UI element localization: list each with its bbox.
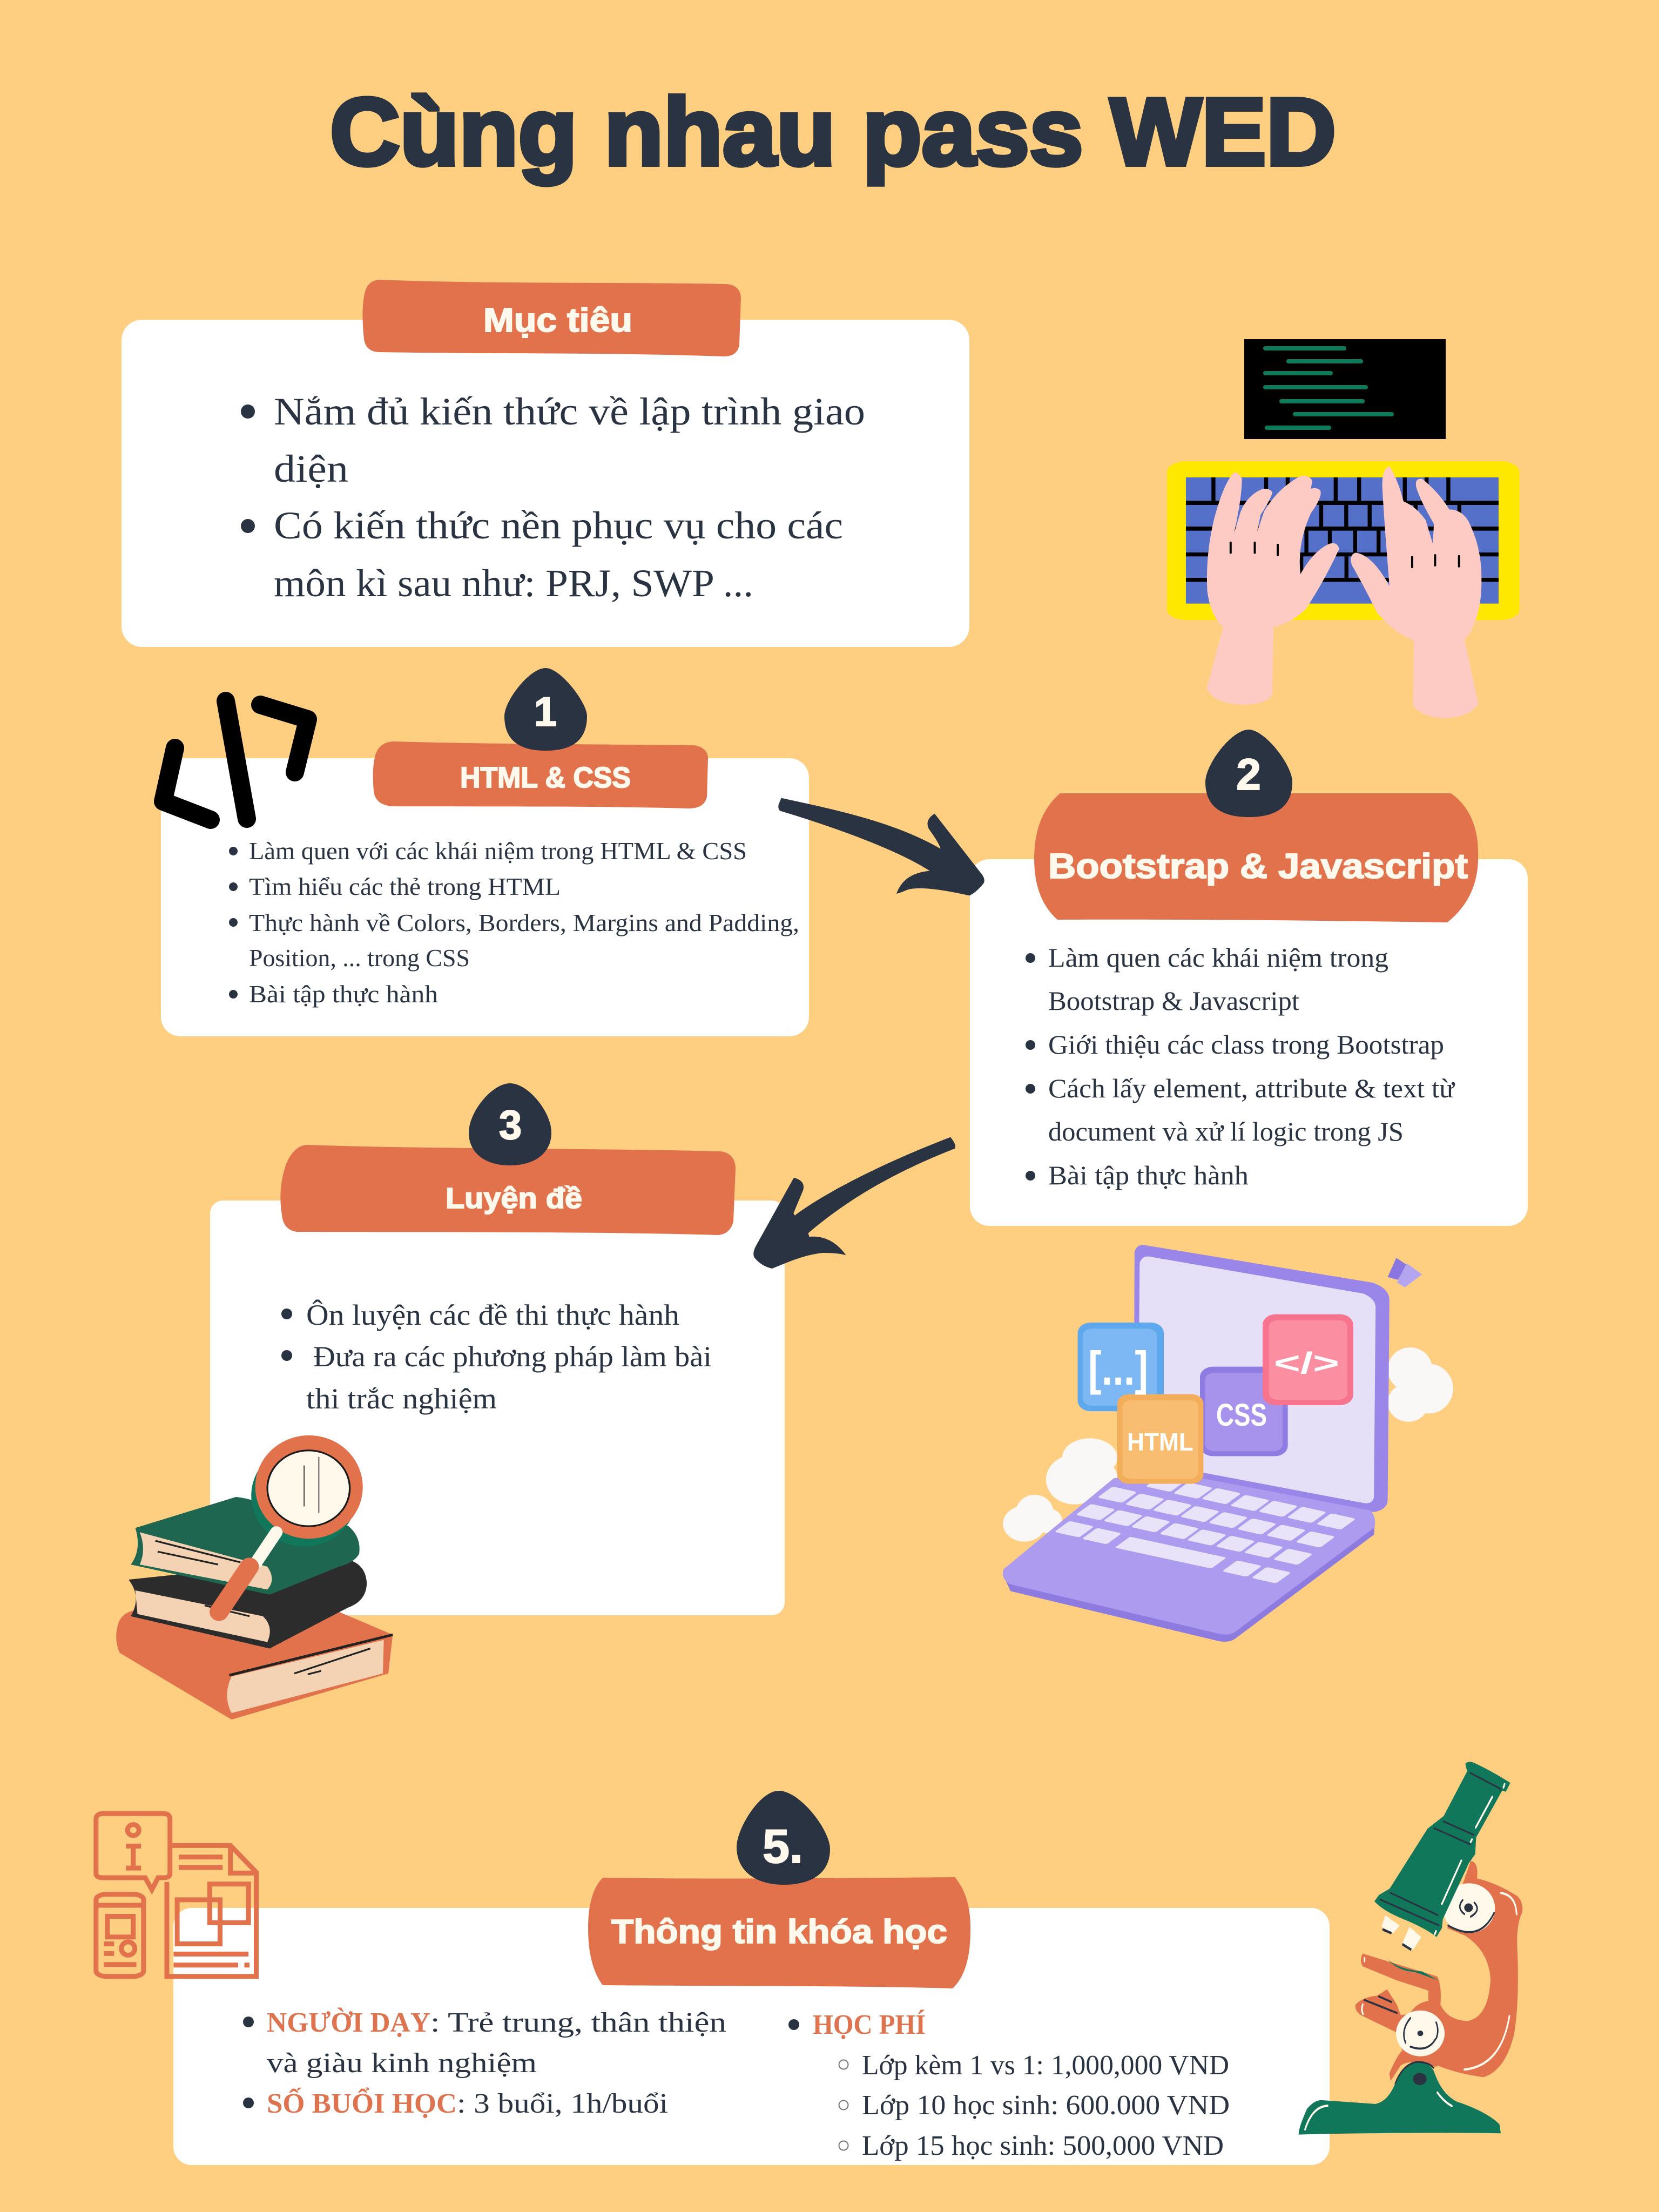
header pill 1	[373, 741, 708, 808]
panel: HTML & CSS	[161, 668, 809, 1036]
list 1: Làm quen với các khái niệm trong HTML & CSS	[249, 837, 747, 865]
info list left	[243, 2007, 726, 2119]
info list left: : 3 buổi, 1h/buổi	[457, 2088, 668, 2119]
label: brackets: [...]	[1088, 1341, 1148, 1395]
info list right: Lớp 15 học sinh: 500,000 VND	[862, 2130, 1224, 2161]
list 1: Tìm hiểu các thẻ trong HTML	[249, 873, 561, 900]
list 2: Giới thiệu các class trong Bootstrap	[1048, 1029, 1444, 1060]
icon: laptop with code cards	[1003, 1245, 1453, 1642]
panel: practice exams	[210, 1083, 785, 1615]
info list right: Lớp kèm 1 vs 1: 1,000,000 VND	[862, 2050, 1229, 2081]
heading 3: Luyện đề	[446, 1182, 582, 1215]
number badge 1	[504, 668, 587, 751]
panel: goals	[122, 280, 969, 647]
list 2: Bài tập thực hành	[1048, 1160, 1249, 1190]
info list right: HỌC PHÍ	[813, 2009, 926, 2040]
number badge 3: 3	[499, 1102, 522, 1148]
list 1: Position, ... trong CSS	[249, 944, 470, 972]
list 1	[229, 837, 799, 1008]
heading 5: Thông tin khóa học	[611, 1913, 947, 1951]
title: Cùng nhau pass WED	[330, 78, 1336, 185]
icon: code screen	[1244, 339, 1446, 439]
heading 2: Bootstrap & Javascript	[1048, 846, 1468, 886]
number badge 5: 5.	[763, 1819, 803, 1873]
goals list: diện	[274, 447, 348, 490]
icon: microscope	[1299, 1762, 1522, 2135]
icon: info documents	[96, 1813, 257, 1977]
goals list: Có kiến thức nền phục vụ cho các	[274, 504, 843, 547]
arrow: step 1 to 2	[778, 798, 984, 895]
number badge 2: 2	[1236, 750, 1261, 799]
number badge 2	[1205, 730, 1292, 817]
header pill 2	[1034, 793, 1478, 922]
list 3: Đưa ra các phương pháp làm bài	[313, 1340, 712, 1373]
list 2: document và xử lí logic trong JS	[1048, 1116, 1404, 1147]
panel: course info	[173, 1791, 1330, 2165]
number badge 5	[737, 1791, 830, 1885]
icon: keyboard and hands	[1167, 461, 1520, 718]
goals list	[241, 390, 865, 605]
info list left: : Trẻ trung, thân thiện	[430, 2007, 726, 2038]
number badge 3	[469, 1083, 551, 1165]
info list left: SỐ BUỔI HỌC	[267, 2087, 457, 2119]
arrow: step 2 to 3	[753, 1137, 955, 1269]
label: HTML: HTML	[1127, 1428, 1193, 1456]
info list right: Lớp 10 học sinh: 600.000 VND	[862, 2090, 1230, 2121]
icon: stacked books and magnifier	[116, 1435, 393, 1719]
heading 1: HTML & CSS	[460, 761, 631, 794]
goals heading: Mục tiêu	[483, 302, 632, 339]
list 3: thi trắc nghiệm	[306, 1382, 497, 1415]
goals list: Nắm đủ kiến thức về lập trình giao	[274, 390, 865, 433]
list 3: Ôn luyện các đề thi thực hành	[306, 1299, 679, 1331]
info list left: NGƯỜI DẠY	[267, 2007, 430, 2038]
list 2: Cách lấy element, attribute & text từ	[1048, 1073, 1455, 1103]
number badge 1: 1	[534, 689, 557, 735]
info list left: và giàu kinh nghiệm	[267, 2048, 537, 2079]
label: CSS: CSS	[1216, 1398, 1267, 1433]
label: code tag: </>	[1274, 1346, 1339, 1380]
list 1: Bài tập thực hành	[249, 980, 438, 1008]
panel: Bootstrap & Javascript	[970, 730, 1528, 1226]
info list right	[788, 2009, 1230, 2161]
list 1: Thực hành về Colors, Borders, Margins and Padding,	[249, 909, 799, 936]
icon: code tag	[163, 701, 308, 820]
header pill 5	[588, 1877, 970, 1988]
cloud right	[1388, 1347, 1453, 1422]
list 2	[1026, 942, 1455, 1190]
goals list: môn kì sau như: PRJ, SWP ...	[274, 562, 753, 605]
list 3	[281, 1299, 712, 1415]
list 2: Làm quen các khái niệm trong	[1048, 942, 1388, 973]
goals header pill	[362, 280, 741, 356]
list 2: Bootstrap & Javascript	[1048, 986, 1299, 1016]
header pill 3	[280, 1145, 736, 1235]
